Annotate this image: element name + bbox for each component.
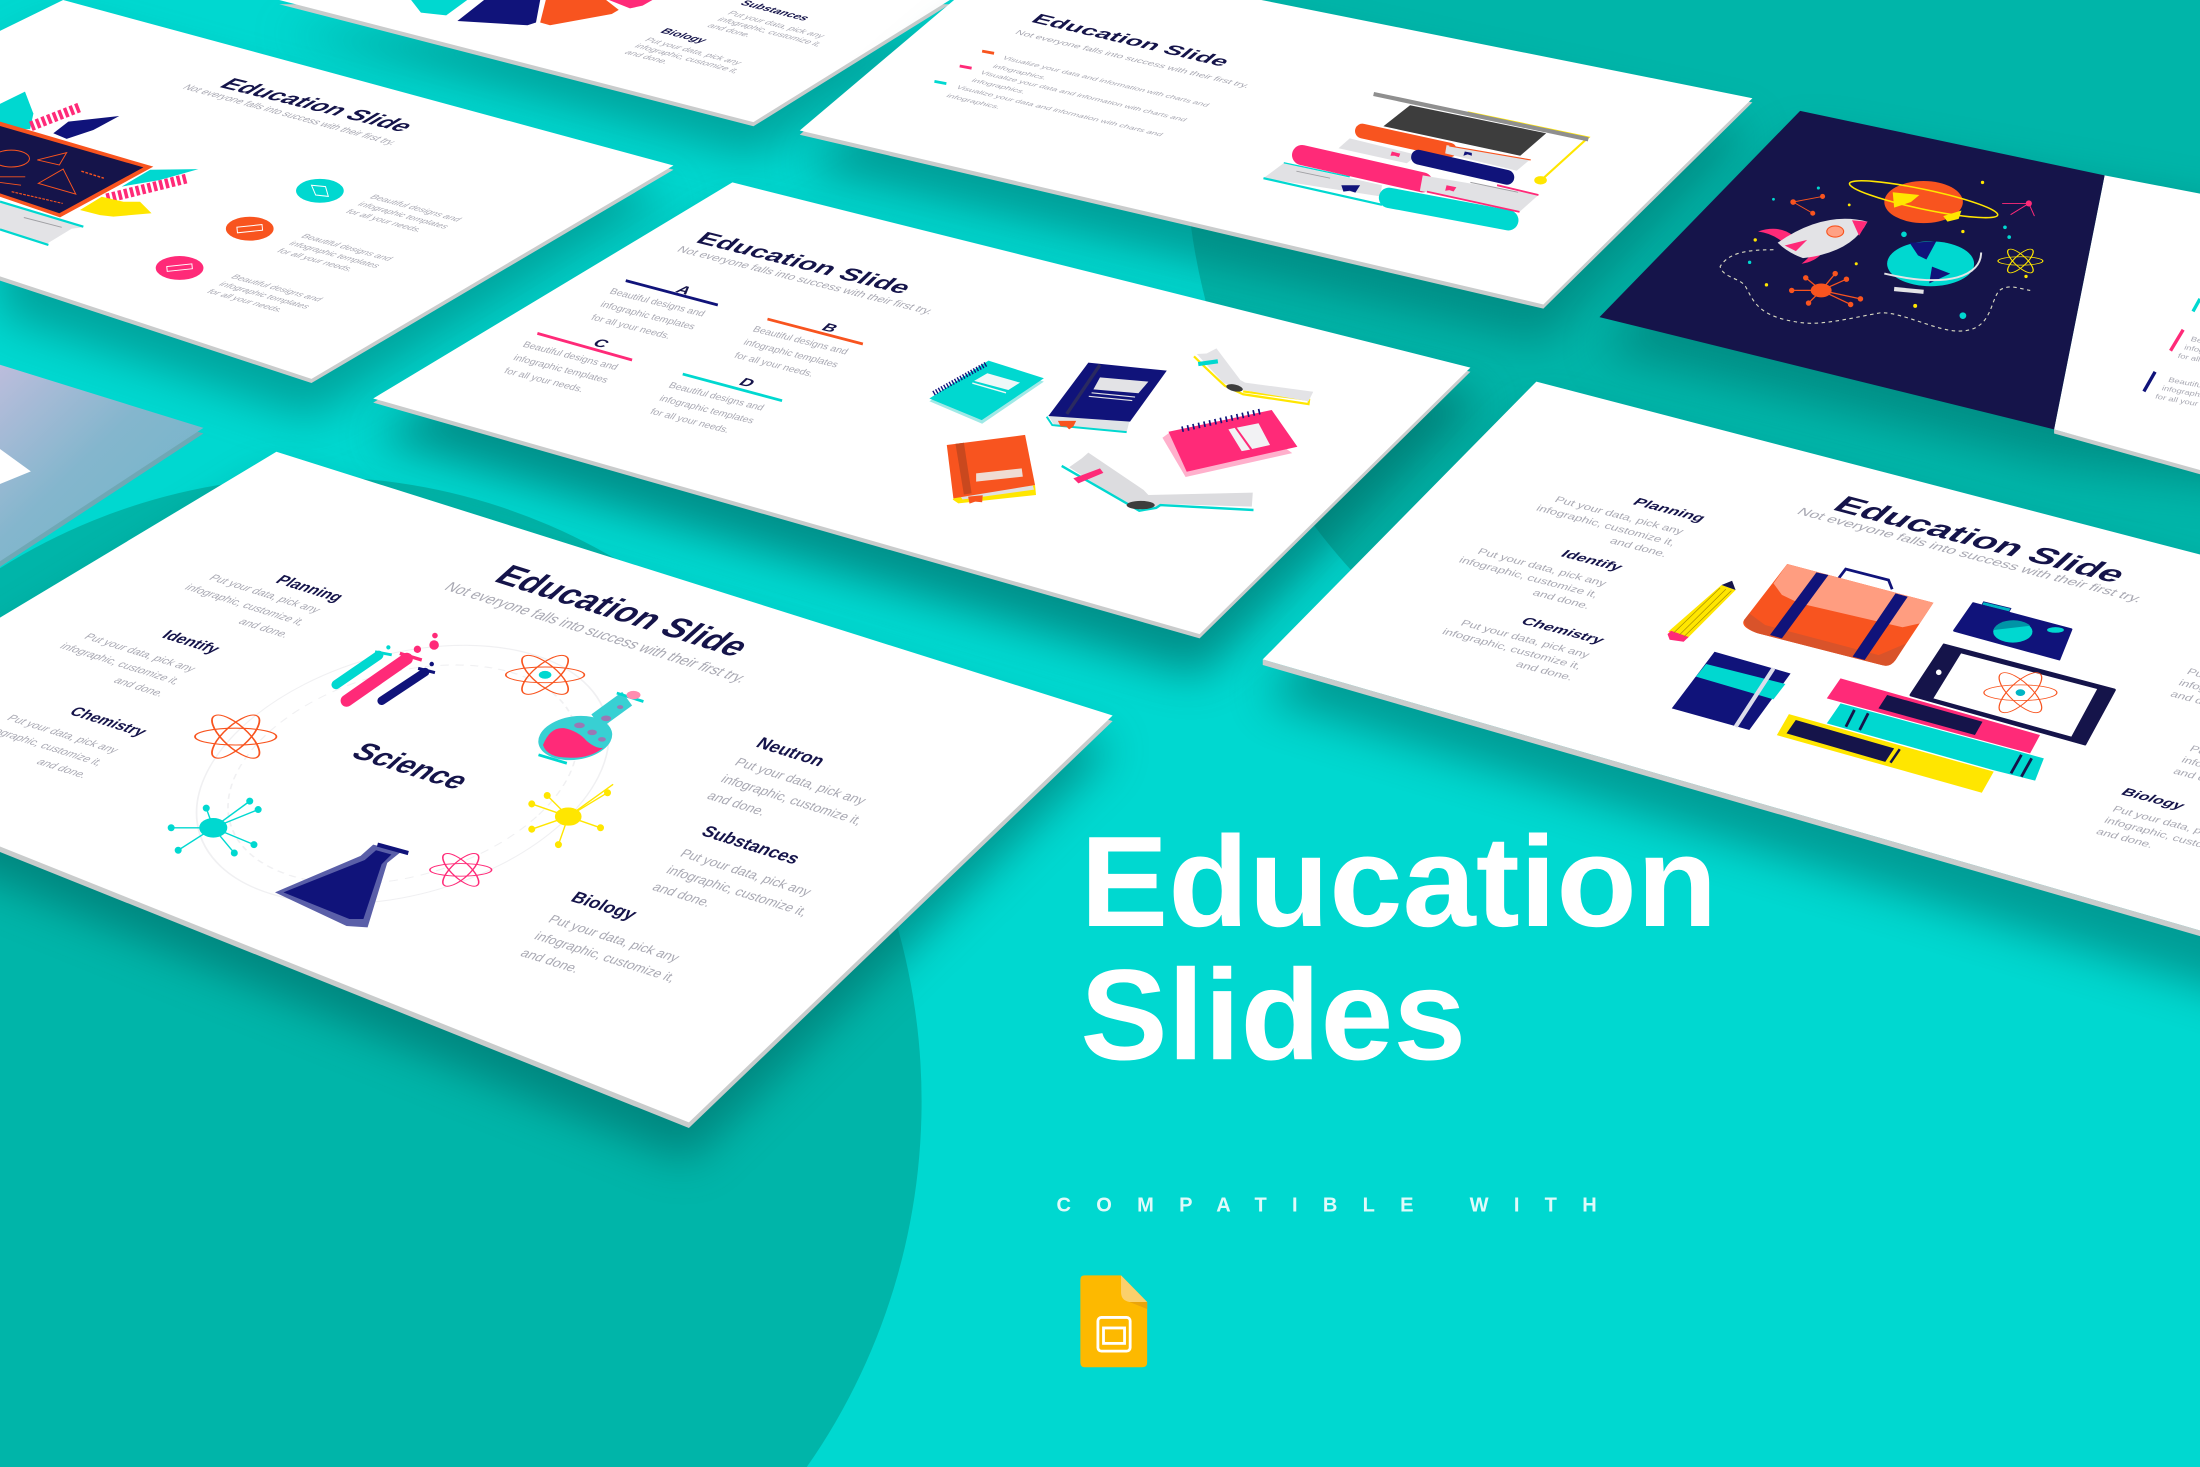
illustration: globe — [1884, 241, 1981, 292]
text: Biology body: Put your data, pick any — [545, 912, 683, 965]
slide: graduation books — [800, 0, 1752, 309]
block D: for all your needs. — [648, 407, 732, 435]
text: Chemistry body: infographic, customize it, — [1440, 627, 1583, 671]
main heading — [1080, 810, 1717, 1087]
text block 1: infographic templates — [354, 201, 452, 231]
icon: yellow book — [1777, 714, 1994, 793]
text block 2: infographic templates — [286, 240, 383, 270]
text: Substances body: and done. — [649, 880, 715, 910]
icon: pink book — [1827, 678, 2040, 753]
right panel ticks and text — [2144, 299, 2200, 414]
icon: orange atom top — [506, 652, 584, 698]
icon: orange book — [947, 435, 1036, 504]
block C: for all your needs. — [502, 366, 586, 395]
illustration: ringed planet — [1847, 174, 2000, 225]
text: Chemistry body: Put your data, pick any — [4, 714, 121, 755]
block A: A — [672, 284, 695, 297]
slide: chalkboard — [0, 0, 673, 383]
text: Planning body: infographic, customize it, — [1534, 504, 1677, 548]
block A: infographic templates — [598, 300, 697, 332]
text block 3: for all your needs. — [203, 288, 286, 314]
text: Identify body: infographic, customize it, — [1457, 556, 1600, 600]
icon: briefcase — [1743, 564, 1933, 666]
label: Biology: Biology — [657, 26, 711, 45]
block A: for all your needs. — [589, 313, 673, 341]
block B: Beautiful designs and — [750, 325, 850, 357]
text: Chemistry body: Put your data, pick any — [1458, 619, 1592, 660]
block C — [502, 333, 632, 399]
text block 3: Beautiful designs and — [227, 274, 325, 303]
bullet list: infographics. — [970, 77, 1029, 95]
text: Biology body: and done. — [517, 946, 583, 975]
text block 2: Beautiful designs and — [298, 233, 395, 263]
bullet list: infographics. — [944, 93, 1003, 110]
subtitle: Not everyone falls into success with their first try. — [1013, 29, 1252, 90]
slide: top wheel — [279, 0, 950, 126]
illustration: dashed path — [1720, 250, 2030, 331]
text: Identify body: infographic, customize it, — [57, 642, 183, 686]
block C: infographic templates — [511, 353, 610, 385]
label: Chemistry: Chemistry — [1517, 615, 1609, 647]
subtitle: Not everyone falls into success with their first try. — [440, 580, 751, 686]
label: Neutron: Neutron — [752, 734, 829, 770]
text: Substances body: infographic, customize it, — [714, 16, 825, 48]
text: Substances body: and done. — [704, 22, 754, 39]
text: Substances body: infographic, customize it, — [663, 863, 811, 919]
illustration: chalkboard — [0, 122, 153, 217]
illustration: book under chalkboard — [0, 202, 83, 245]
background circle: top right — [1185, 0, 2200, 779]
illustration: leaves — [0, 92, 198, 217]
compatible with label: COMPATIBLE WITH — [1057, 1195, 1597, 1217]
illustration: book stack and graduation cap — [1263, 94, 1588, 220]
subtitle: Not everyone falls into success with their first try. — [179, 84, 400, 147]
bullet list: Visualize your data and information with charts and — [1001, 55, 1212, 108]
text: Biology body: Put your data, pick any — [641, 36, 745, 67]
icon: test tubes — [336, 633, 439, 701]
text: Planning body: and done. — [1607, 536, 1669, 559]
icon: large open book — [1062, 453, 1253, 511]
bullet list: infographics. — [991, 63, 1050, 81]
label: Biology: Biology — [2117, 786, 2189, 812]
label: Identify: Identify — [158, 628, 224, 657]
text: Neutron body: infographic, customize it, — [718, 772, 866, 827]
text: Planning body: Put your data, pick any — [1552, 495, 1686, 537]
slide: science — [0, 452, 1113, 1128]
icon: navy book — [1047, 363, 1167, 432]
illustration: orbit rings — [112, 605, 693, 944]
block D: Beautiful designs and — [666, 381, 766, 413]
right panel ticks and text: for all your — [2154, 393, 2200, 408]
icon: small open book — [1194, 348, 1313, 404]
bullet list: Visualize your data and information with charts and — [978, 69, 1190, 123]
block A — [589, 281, 718, 345]
icon: teal circle — [296, 179, 344, 203]
text: Planning body: Put your data, pick any — [206, 573, 323, 615]
text: Planning body: infographic, customize it, — [181, 583, 308, 627]
text: Substances body: Put your data, pick any — [677, 846, 815, 899]
block A: Beautiful designs and — [607, 287, 707, 319]
block C: Beautiful designs and — [520, 340, 620, 372]
subtitle: Not everyone falls into success with their first try. — [1793, 506, 2146, 605]
block D: D — [735, 376, 758, 390]
illustration: yellow atom — [1998, 247, 2043, 275]
main heading: Education — [1080, 810, 1717, 954]
icon: orange atom left — [195, 711, 276, 762]
label: Identify: Identify — [1557, 548, 1627, 574]
text block 1: Beautiful designs and — [366, 194, 464, 223]
text: Identify body: and done. — [1530, 588, 1592, 611]
text: Neutron body: and done. — [704, 789, 770, 818]
label: Biology: Biology — [567, 888, 641, 923]
text block 2: for all your needs. — [274, 247, 356, 273]
title: Education Slide — [691, 229, 917, 298]
block D — [648, 374, 782, 439]
block D: infographic templates — [657, 394, 756, 426]
icon: teal notebook — [929, 361, 1044, 424]
slide: books — [373, 182, 1470, 638]
wheel segments — [411, 0, 652, 25]
icon: pink notebook — [1162, 410, 1297, 477]
title: Education Slide — [1027, 11, 1235, 69]
label: Chemistry: Chemistry — [65, 704, 151, 739]
text: Biology body: and done. — [621, 49, 672, 66]
block B: for all your needs. — [732, 351, 816, 379]
text: Biology body: and done. — [2094, 827, 2155, 850]
text: Planning body: and done. — [235, 617, 292, 640]
icon: teal molecule — [168, 798, 261, 856]
label: Planning: Planning — [272, 573, 348, 605]
icon: round flask — [535, 691, 643, 765]
label: Planning: Planning — [1629, 496, 1709, 524]
background circle: bottom left — [0, 477, 922, 1467]
label: Substances: Substances — [698, 822, 804, 868]
icon: teal book — [1827, 703, 2044, 781]
bullet list — [934, 51, 1212, 138]
icon: Google Slides — [1080, 1275, 1147, 1367]
slide: dark space panel — [1599, 111, 2200, 474]
title: Education Slide — [1826, 492, 2134, 588]
text: Chemistry body: and done. — [1513, 660, 1575, 683]
text: Neutron body: Put your data, pick any — [732, 755, 870, 807]
text: Identify body: and done. — [110, 676, 167, 699]
center label: Science: Science — [344, 738, 477, 795]
icon: tablet — [1911, 645, 2114, 744]
block C: C — [589, 337, 612, 351]
text: Biology body: infographic, customize it, — [531, 929, 679, 985]
text block 1: for all your needs. — [342, 208, 425, 234]
text block 3: infographic templates — [215, 281, 313, 311]
icon: camera — [1954, 602, 2071, 659]
title: Education Slide — [213, 75, 420, 135]
subtitle: Not everyone falls into success with their first try. — [674, 244, 937, 316]
text: Identify body: Put your data, pick any — [81, 632, 198, 674]
block B: B — [818, 322, 841, 335]
block B — [732, 319, 863, 383]
text: Substances body: Put your data, pick any — [724, 10, 828, 40]
icon: navy flask — [275, 845, 408, 927]
icon: yellow molecule — [529, 784, 613, 847]
bullet list: Visualize your data and information with charts and — [954, 84, 1166, 138]
title: Education Slide — [486, 559, 759, 663]
main heading: Slides — [1080, 943, 1466, 1087]
illustration: rocket — [1758, 219, 1867, 264]
text: Chemistry body: and done. — [33, 758, 90, 780]
slide: toolkit — [1263, 382, 2200, 965]
slide: blue panel — [0, 365, 203, 567]
illustration: constellations and stars — [1748, 181, 2034, 319]
icon: pink circle — [156, 256, 203, 280]
icon: pink atom — [430, 851, 492, 889]
icon: orange circle — [226, 217, 274, 241]
icon: pencil — [1668, 581, 1736, 642]
illustration: molecule — [1790, 271, 1863, 307]
text: Identify body: Put your data, pick any — [1475, 547, 1609, 589]
block B: infographic templates — [741, 338, 840, 370]
text: Biology body: infographic, customize it, — [631, 43, 742, 75]
icon: notebook — [1672, 652, 1791, 730]
